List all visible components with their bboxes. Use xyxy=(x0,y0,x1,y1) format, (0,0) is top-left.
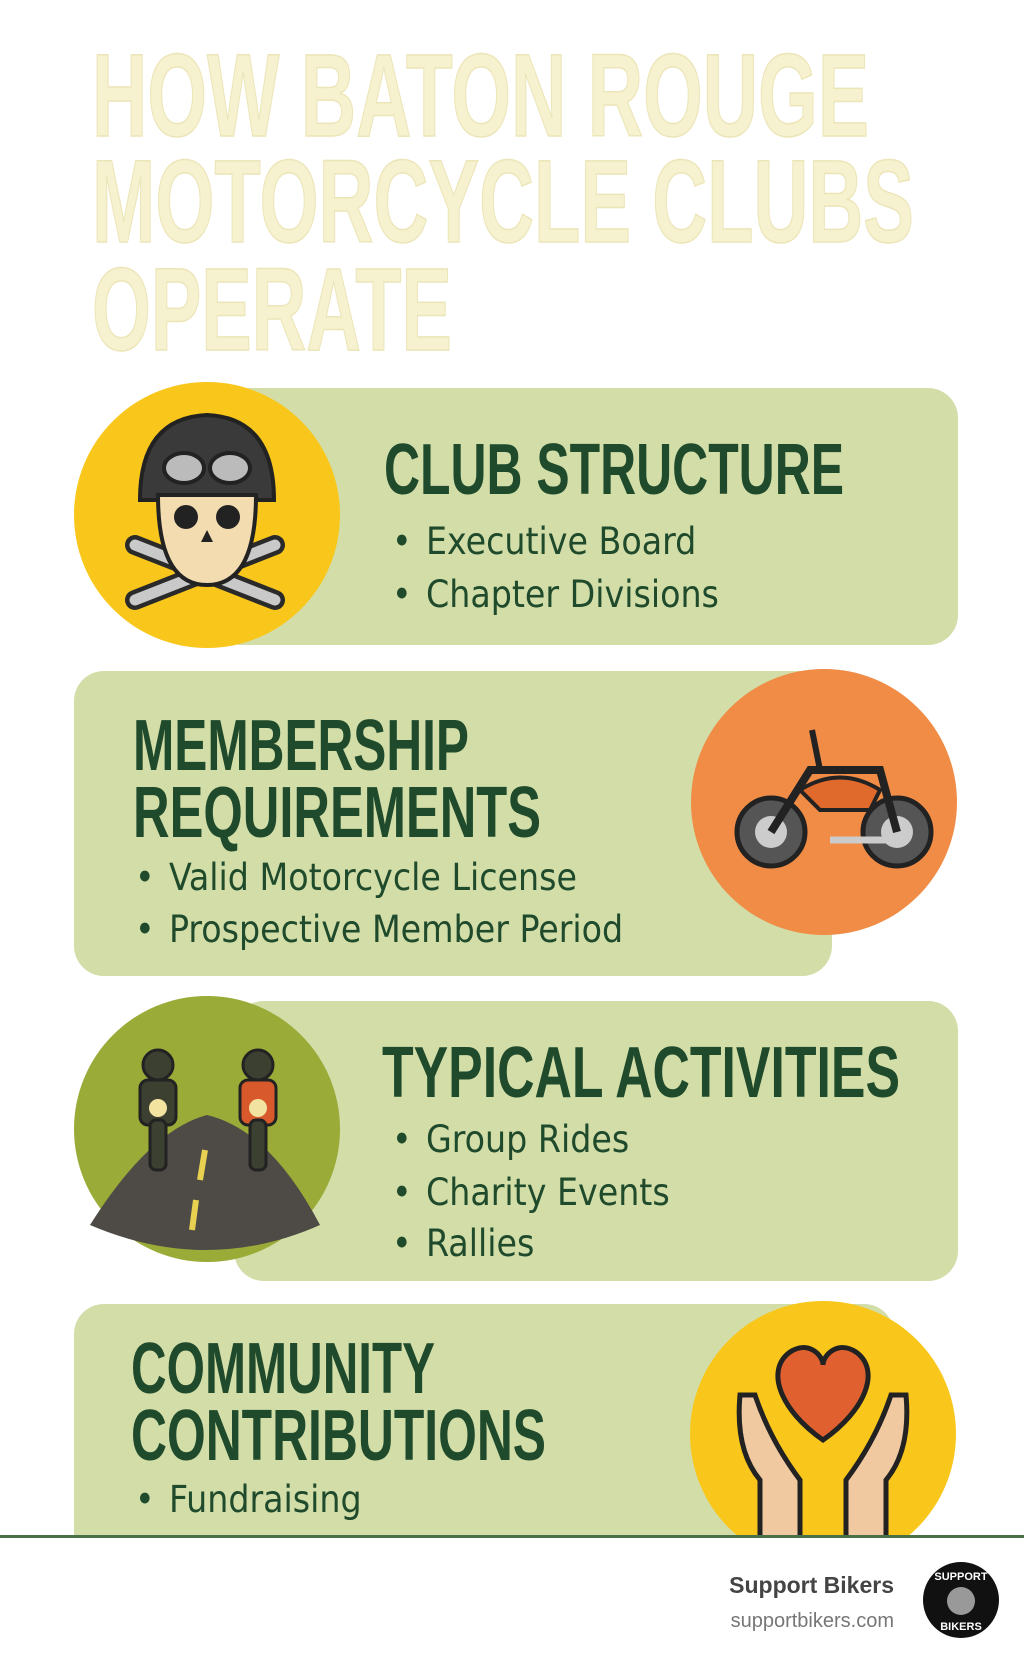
bullets: club structure: • xyxy=(392,573,412,616)
logo xyxy=(923,1562,999,1638)
footer text xyxy=(729,1572,894,1632)
title: OPERATE xyxy=(92,244,452,376)
panel: membership requirements xyxy=(74,669,957,976)
bullets: activities: • xyxy=(392,1118,412,1161)
panel: community contributions xyxy=(74,1301,956,1567)
bullets: club structure: Executive Board xyxy=(426,520,696,563)
icon: riders on road xyxy=(74,996,340,1262)
heading: membership requirements: REQUIREMENTS xyxy=(133,773,541,853)
bullets: membership: • xyxy=(135,908,155,951)
bullets: membership: • xyxy=(135,856,155,899)
footer xyxy=(0,1535,1024,1666)
panel: club structure xyxy=(74,382,958,648)
bullets: membership: Valid Motorcycle License xyxy=(169,856,577,899)
heading: community contributions xyxy=(131,1329,546,1476)
icon: heart in hands xyxy=(690,1301,956,1567)
logo: BIKERS xyxy=(940,1621,982,1633)
bullets: community: Fundraising xyxy=(169,1478,362,1521)
icon: motorcycle xyxy=(691,669,957,935)
bullets: activities: • xyxy=(392,1222,412,1265)
bullets: activities: • xyxy=(392,1171,412,1214)
footer text: supportbikers.com xyxy=(731,1610,894,1632)
bullets: club structure: • xyxy=(392,520,412,563)
bullets: activities: Charity Events xyxy=(426,1171,670,1214)
bullets: club structure xyxy=(392,520,719,616)
bullets: activities: Group Rides xyxy=(426,1118,629,1161)
heading: membership requirements xyxy=(133,706,541,853)
panel: typical activities xyxy=(74,996,958,1281)
bullets: club structure: Chapter Divisions xyxy=(426,573,719,616)
bullets: community: • xyxy=(135,1478,155,1521)
heading: community contributions: COMMUNITY xyxy=(131,1329,435,1409)
bullets: membership xyxy=(135,856,623,951)
title xyxy=(92,30,914,376)
bullets: membership: Prospective Member Period xyxy=(169,908,623,951)
footer text: Support Bikers xyxy=(729,1572,894,1598)
logo: SUPPORT xyxy=(934,1571,988,1583)
heading: membership requirements: MEMBERSHIP xyxy=(133,706,469,786)
icon: skull helmet xyxy=(74,382,340,648)
heading: community contributions: CONTRIBUTIONS xyxy=(131,1396,546,1476)
bullets: activities: Rallies xyxy=(426,1222,534,1265)
bullets: activities xyxy=(392,1118,670,1265)
